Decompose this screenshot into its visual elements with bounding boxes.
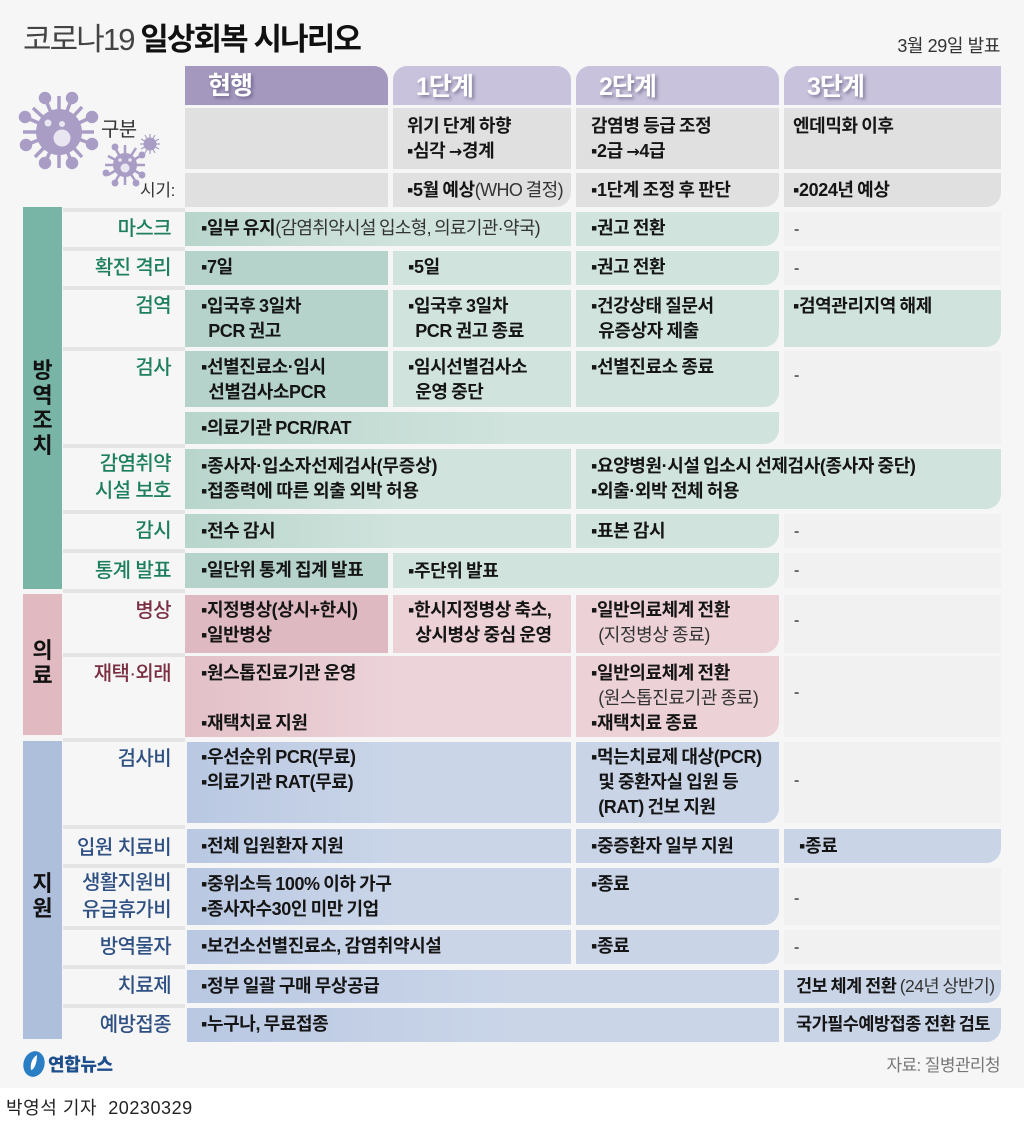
row: beds stage 1 — [393, 595, 571, 653]
row: living support stage 3: - — [794, 890, 799, 907]
timing row: stage 3 — [784, 173, 1001, 207]
row: supplies stage 2 — [576, 930, 779, 964]
section bar: support — [23, 741, 62, 1039]
row: test cost stage 2 — [576, 742, 779, 823]
section bar: quarantine measures — [23, 207, 62, 589]
row: treatment current to stage 2: ▪정부 일괄 구매 무상공급 — [201, 976, 379, 996]
row: surveillance stage 3 — [784, 514, 1001, 548]
row: isolation stage 3: - — [794, 260, 799, 277]
row: home care current and stage 1: ▪원스톱진료기관 운영 — [201, 663, 356, 683]
row: living support current and stage 1: ▪종사자수30인 미만 기업 — [201, 899, 379, 919]
section bar: quarantine measures: 조 — [32, 408, 53, 433]
row: statistics stage 3 — [784, 553, 1001, 588]
row label: vulnerable facilities: 감염취약 — [100, 453, 171, 475]
row: testing current: ▪선별진료소·임시 — [201, 357, 326, 377]
row: border stage 1: ▪입국후 3일차 — [408, 296, 508, 316]
row: mask stage 3: - — [794, 221, 799, 238]
timing row: current — [185, 173, 388, 207]
row: test cost current and stage 1 — [187, 742, 571, 823]
row: hospitalization stage 3 — [784, 829, 1001, 863]
row: living support stage 3 — [784, 868, 1001, 925]
row: border stage 3: ▪검역관리지역 해제 — [793, 296, 932, 316]
row: vaccination stage 3: 국가필수예방접종 전환 검토 — [796, 1014, 990, 1034]
row: statistics stage 3: - — [794, 562, 799, 579]
timing row: stage 2 — [576, 173, 779, 207]
row: border current — [185, 290, 388, 347]
label: timing: 시기: — [140, 181, 175, 200]
row: home care stage 2 — [576, 656, 779, 737]
row: supplies current and stage 1: ▪보건소선별진료소, 감염취약시설 — [201, 936, 441, 956]
row label: testing: 검사 — [135, 357, 171, 379]
timing row: stage 2: ▪1단계 조정 후 판단 — [591, 180, 731, 200]
row: home care current and stage 1 — [185, 656, 571, 737]
phase row: stage 2 — [576, 108, 779, 169]
header: current — [185, 66, 388, 105]
announcement date: 3월 29일 발표 — [897, 36, 1000, 56]
row: hospitalization current and stage 1: ▪전체 입원환자 지원 — [201, 836, 343, 856]
row: living support current and stage 1: ▪중위소득 100% 이하 가구 — [201, 874, 392, 894]
timing row: stage 1 — [393, 173, 571, 207]
row: statistics current — [185, 553, 388, 588]
row: testing current — [185, 351, 388, 407]
row label: border quarantine: 검역 — [135, 295, 171, 317]
row: home care stage 2: ▪재택치료 종료 — [591, 713, 698, 733]
row label: vulnerable facilities: 시설 보호 — [95, 480, 171, 502]
header: stage 2 — [576, 66, 779, 105]
row: home care stage 3 — [784, 656, 1001, 737]
row: testing stage 2 — [576, 351, 779, 407]
row: vulnerable current and stage 1 — [185, 449, 571, 509]
timing row: stage 1: ▪5월 예상(WHO 결정) — [407, 180, 563, 200]
phase row: stage 1 — [393, 108, 571, 169]
row: border current: PCR 권고 — [208, 321, 281, 341]
row: vulnerable current and stage 1: ▪종사자·입소자선제검사(무증상) — [201, 456, 437, 476]
section bar: medical: 료 — [32, 663, 53, 688]
row: isolation current: ▪7일 — [201, 257, 233, 277]
row: mask current and stage 1 — [185, 212, 571, 246]
logo: Yonhap News: 연합뉴스 — [48, 1055, 113, 1075]
row: testing current: 선별검사소PCR — [208, 382, 326, 402]
row label: living and paid leave support: 생활지원비 — [82, 872, 171, 894]
phase row: stage 2: 감염병 등급 조정 — [591, 116, 711, 136]
section bar: medical: 의 — [32, 638, 53, 663]
row: hospitalization stage 2: ▪중증환자 일부 지원 — [591, 836, 733, 856]
row label: test cost: 검사비 — [118, 748, 171, 770]
section bar: quarantine measures: 방 — [32, 358, 53, 383]
row: isolation stage 1 — [393, 251, 571, 285]
section bar: quarantine measures: 역 — [32, 383, 53, 408]
row: border stage 2 — [576, 290, 779, 347]
row: testing stage 3 — [784, 351, 1001, 444]
row: isolation stage 1: ▪5일 — [408, 257, 440, 277]
row: surveillance stage 3: - — [794, 523, 799, 540]
row label: living and paid leave support — [82, 872, 171, 921]
row: hospitalization current and stage 1 — [187, 829, 571, 863]
row: treatment current to stage 2 — [187, 970, 779, 1003]
row: testing stage 1: 운영 중단 — [415, 382, 483, 402]
row: vaccination stage 3 — [784, 1008, 1001, 1042]
row label: quarantine supplies: 방역물자 — [100, 936, 171, 958]
row: supplies stage 3: - — [794, 939, 799, 956]
source: 자료: 질병관리청 — [886, 1056, 1000, 1075]
row: vulnerable stage 2 and 3 — [576, 449, 1001, 509]
row: test cost stage 2: 및 중환자실 입원 등 — [598, 772, 738, 792]
row: vulnerable stage 2 and 3: ▪요양병원·시설 입소시 선제검사(종사자 중단) — [591, 456, 915, 476]
phase row: current — [185, 108, 388, 169]
row: supplies stage 2: ▪종료 — [591, 936, 629, 956]
row: statistics stage 1 and 2: ▪주단위 발표 — [408, 561, 498, 581]
row: beds stage 3 — [784, 595, 1001, 653]
timing row: stage 3: ▪2024년 예상 — [793, 180, 890, 200]
header: stage 2: 2단계 — [599, 73, 656, 101]
row: living support stage 2: ▪종료 — [591, 874, 629, 894]
header: stage 1: 1단계 — [416, 73, 473, 101]
row: testing stage 1: ▪임시선별검사소 — [408, 357, 527, 377]
row: treatment stage 3 — [784, 970, 1001, 1003]
row: mask current and stage 1: ▪일부 유지(감염취약시설 입소형, 의료기관·약국) — [201, 218, 540, 238]
row: beds current: ▪일반병상 — [201, 625, 272, 645]
row: testing medical institutions: ▪의료기관 PCR/RAT — [201, 418, 351, 438]
label: category: 구분 — [101, 119, 137, 141]
row: beds stage 2: ▪일반의료체계 전환 — [591, 600, 730, 620]
row: living support current and stage 1 — [187, 868, 571, 925]
row: vulnerable current and stage 1: ▪접종력에 따른 외출 외박 허용 — [201, 481, 419, 501]
row: test cost stage 3: - — [794, 772, 799, 789]
title: 코로나19 일상회복 시나리오 — [23, 22, 360, 57]
header: stage 3 — [784, 66, 1001, 105]
row: beds current: ▪지정병상(상시+한시) — [201, 600, 358, 620]
row label: statistics: 통계 발표 — [95, 560, 171, 582]
section bar: support: 원 — [32, 896, 53, 921]
row: surveillance current and stage 1: ▪전수 감시 — [201, 521, 275, 541]
row: statistics current: ▪일단위 통계 집계 발표 — [201, 560, 363, 580]
row label: vaccination: 예방접종 — [100, 1014, 171, 1036]
row: vulnerable stage 2 and 3: ▪외출·외박 전체 허용 — [591, 481, 739, 501]
row: isolation stage 2 — [576, 251, 779, 285]
row: beds stage 1: ▪한시지정병상 축소, — [408, 600, 551, 620]
row: border stage 1: PCR 권고 종료 — [415, 321, 524, 341]
section bar: support: 지 — [32, 871, 53, 896]
icon: virus cluster — [18, 92, 160, 186]
row: mask stage 2 — [576, 212, 779, 246]
row: surveillance current and stage 1 — [185, 514, 571, 548]
row: beds stage 2: (지정병상 종료) — [598, 625, 710, 645]
row: statistics stage 1 and 2 — [393, 553, 779, 588]
row label: treatment: 치료제 — [118, 975, 171, 997]
row: test cost current and stage 1: ▪의료기관 RAT(무료) — [201, 772, 353, 792]
row: home care current and stage 1: ▪재택치료 지원 — [201, 713, 308, 733]
row: living support stage 2 — [576, 868, 779, 925]
row label: home care and outpatient: 재택·외래 — [94, 663, 171, 685]
phase row: stage 3: 엔데믹화 이후 — [793, 116, 894, 136]
row: beds current — [185, 595, 388, 653]
phase row: stage 2: ▪2급 →4급 — [591, 141, 665, 161]
row: test cost stage 2: (RAT) 건보 지원 — [598, 797, 716, 817]
row: testing stage 1 — [393, 351, 571, 407]
row: test cost stage 2: ▪먹는치료제 대상(PCR) — [591, 747, 762, 767]
row: test cost current and stage 1: ▪우선순위 PCR(무료) — [201, 747, 356, 767]
logo: Yonhap News — [23, 1051, 113, 1077]
phase row: stage 1: ▪심각 →경계 — [407, 141, 494, 161]
section bar: medical — [23, 594, 62, 735]
row: beds stage 1: 상시병상 중심 운영 — [415, 625, 552, 645]
row: supplies current and stage 1 — [187, 930, 571, 964]
row label: hospital beds: 병상 — [135, 600, 171, 622]
row: border stage 3 — [784, 290, 1001, 347]
row: beds stage 2 — [576, 595, 779, 653]
icon: globe logo — [23, 1051, 45, 1077]
row label: living and paid leave support: 유급휴가비 — [82, 899, 171, 921]
header: stage 1 — [393, 66, 571, 105]
row: supplies stage 3 — [784, 930, 1001, 964]
phase row: stage 3 — [784, 108, 1001, 169]
row: vaccination current to stage 2 — [187, 1008, 779, 1042]
row: isolation current — [185, 251, 388, 285]
row: border current: ▪입국후 3일차 — [201, 296, 301, 316]
row: testing stage 2: ▪선별진료소 종료 — [591, 357, 714, 377]
row: mask stage 3 — [784, 212, 1001, 246]
row label: hospitalization cost: 입원 치료비 — [77, 837, 171, 859]
row label: isolation: 확진 격리 — [95, 257, 171, 279]
row: testing medical institutions — [185, 412, 779, 444]
row: mask stage 2: ▪권고 전환 — [591, 218, 665, 238]
section bar: quarantine measures: 치 — [32, 433, 53, 458]
row: hospitalization stage 2 — [576, 829, 779, 863]
row: border stage 1 — [393, 290, 571, 347]
row: home care stage 2: ▪일반의료체계 전환 — [591, 663, 730, 683]
row: vaccination current to stage 2: ▪누구나, 무료접종 — [201, 1014, 328, 1034]
row: treatment stage 3: 건보 체계 전환 (24년 상반기) — [796, 976, 995, 996]
row: surveillance stage 2 — [576, 514, 779, 548]
row: home care stage 2: (원스톱진료기관 종료) — [598, 688, 758, 708]
row: home care stage 3: - — [794, 684, 799, 701]
row label: mask: 마스크 — [118, 218, 171, 240]
row: surveillance stage 2: ▪표본 감시 — [591, 521, 665, 541]
row: isolation stage 2: ▪권고 전환 — [591, 257, 665, 277]
row label: vulnerable facilities — [95, 453, 171, 502]
row: border stage 2: ▪건강상태 질문서 — [591, 296, 714, 316]
row: testing stage 3: - — [794, 367, 799, 384]
row label: surveillance: 감시 — [135, 520, 171, 542]
row: test cost stage 3 — [784, 742, 1001, 823]
row: hospitalization stage 3: ▪종료 — [799, 836, 837, 856]
row: isolation stage 3 — [784, 251, 1001, 285]
phase row: stage 1: 위기 단계 하향 — [407, 116, 511, 136]
row: beds stage 3: - — [794, 612, 799, 629]
header: stage 3: 3단계 — [807, 73, 864, 101]
row: border stage 2: 유증상자 제출 — [598, 321, 699, 341]
credit: 박영석 기자 20230329 — [6, 1098, 193, 1118]
header: current: 현행 — [208, 72, 252, 100]
